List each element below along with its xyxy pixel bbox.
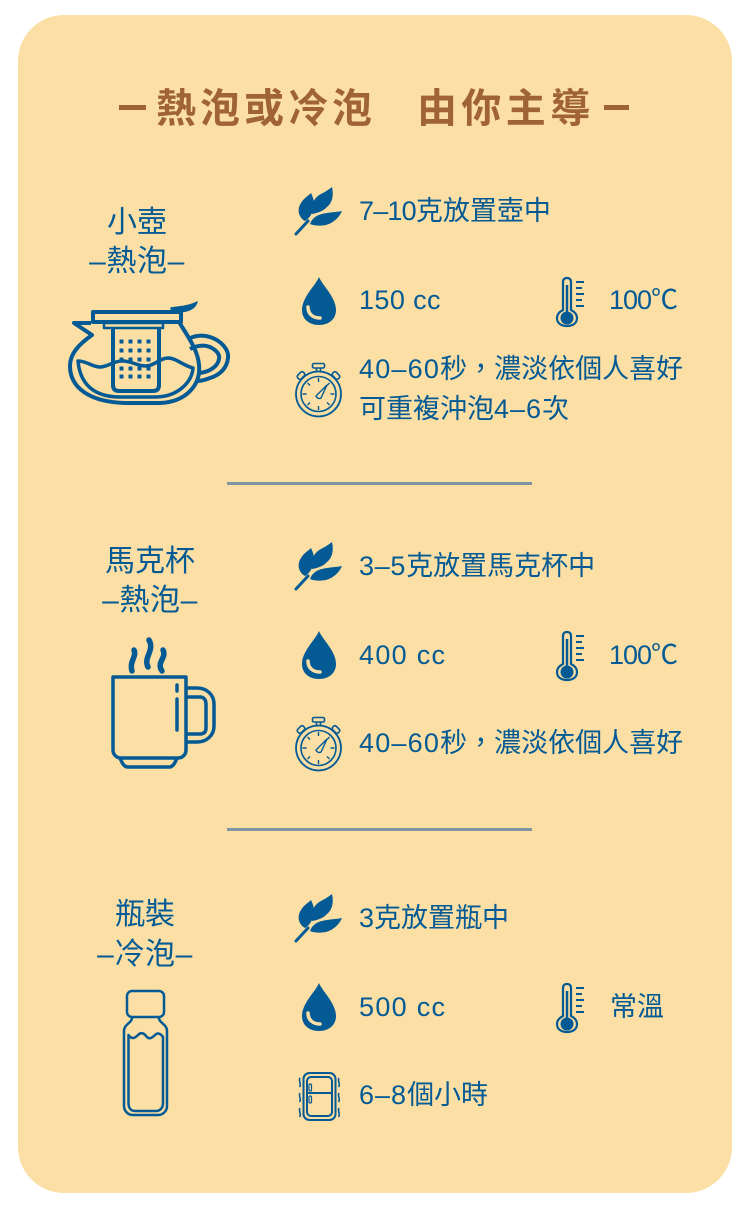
icon: water drop [302,631,336,679]
text: tea amount: 3克放置瓶中 [359,903,509,933]
text: temperature: 100℃ [609,285,677,315]
text: steep time: 40–60秒，濃淡依個人喜好 [359,728,683,758]
icon: tea leaf [294,542,342,591]
text: tea amount: 7–10克放置壺中 [359,196,551,226]
text: steep time: 40–60秒，濃淡依個人喜好 [359,354,683,384]
heading: 馬克杯: 馬克杯 [105,545,195,578]
panel: mug hot brew [102,542,683,772]
text: temperature: 100℃ [609,640,677,670]
heading: 熱泡: –熱泡– [89,245,185,278]
text: steep time: 6–8個小時 [359,1080,488,1110]
heading: 小壺: 小壺 [107,206,167,239]
icon: teapot [68,301,230,405]
icon: mug [111,637,216,769]
icon: stopwatch [295,362,342,418]
icon: refrigerator [298,1072,340,1121]
title dash right [604,105,629,110]
text: re-steep: 可重複沖泡4–6次 [359,394,569,424]
title dash left [119,105,146,110]
panel: bottle cold brew [97,894,664,1121]
icon: bottle [122,990,168,1116]
heading: 冷泡: –冷泡– [97,938,193,971]
icon: thermometer [556,276,584,328]
text: water amount: 500 cc [359,992,446,1022]
title [119,87,629,131]
icon: thermometer [556,982,584,1034]
text: water amount: 400 cc [359,640,446,670]
title text: 熱泡或冷泡: 熱泡或冷泡 [156,87,376,131]
icon: thermometer [556,630,584,682]
icon: tea leaf [294,894,342,943]
icon: water drop [302,983,336,1031]
text: water amount: 150 cc [359,285,441,315]
icon: tea leaf [294,187,342,236]
text: tea amount: 3–5克放置馬克杯中 [359,551,595,581]
icon: water drop [302,277,336,325]
title text: 由你主導: 由你主導 [417,87,595,131]
panel: small teapot hot brew [68,187,683,424]
icon: stopwatch [295,716,342,772]
heading: 熱泡: –熱泡– [102,584,198,617]
heading: 瓶裝: 瓶裝 [115,898,175,931]
text: temperature: 常溫 [610,992,664,1022]
